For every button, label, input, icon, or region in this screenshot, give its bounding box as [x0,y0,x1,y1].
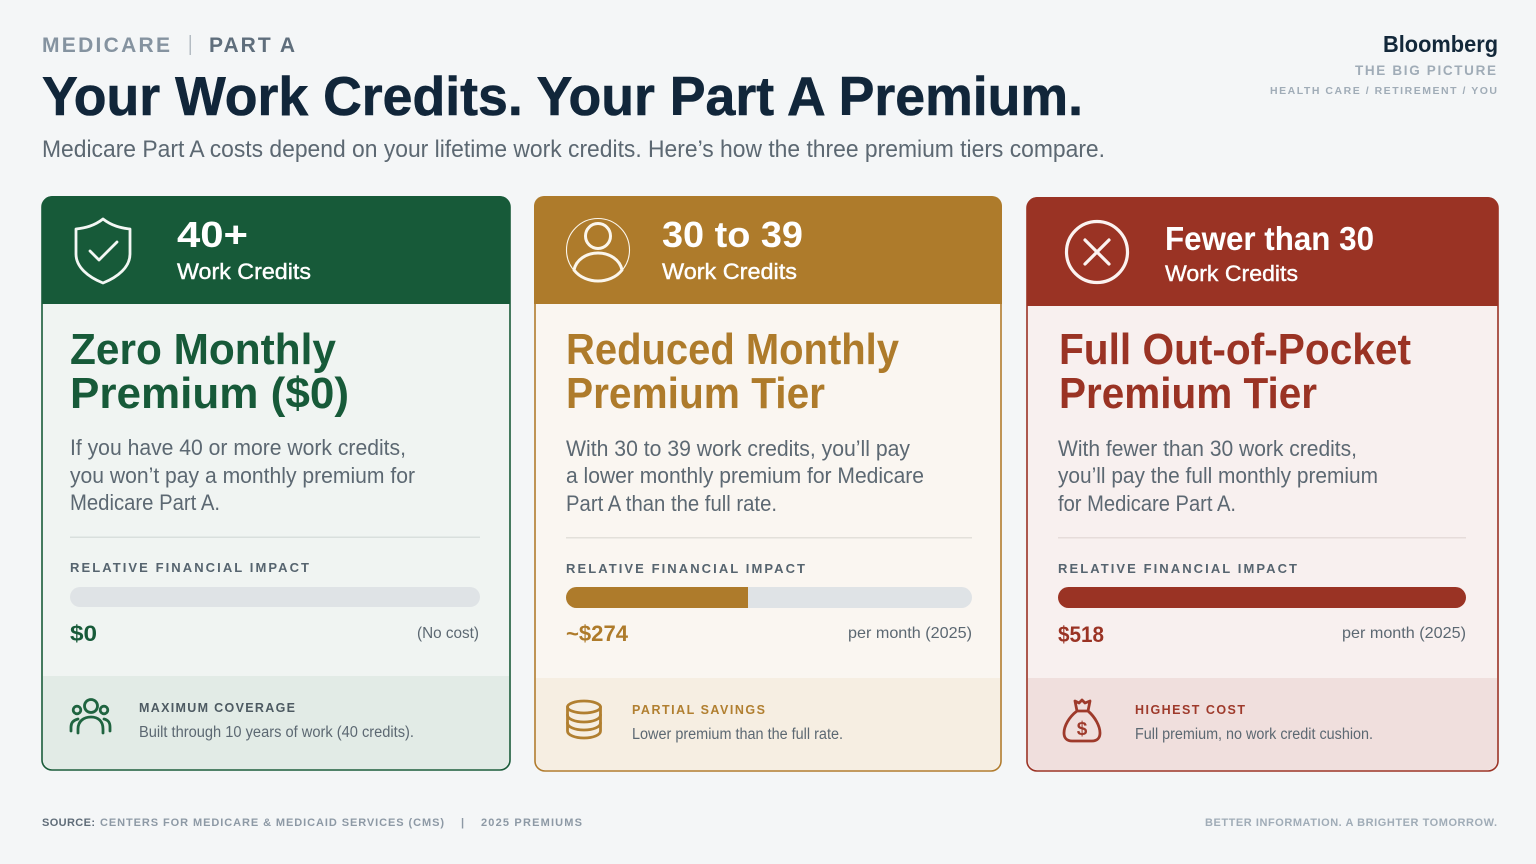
card heading [566,325,899,418]
impact bar [1058,587,1466,608]
impact bar [566,587,972,608]
title: Your Work Credits. Your Part A Premium. [42,65,1083,127]
icon: circle x [1066,222,1128,282]
tier label [1165,220,1374,286]
source line: | [461,817,464,829]
card body: red [1027,198,1498,771]
card body: amber [535,197,1001,771]
icon: coin stack [568,701,600,738]
footer note: PARTIAL SAVINGS [632,703,765,717]
impact value [566,621,972,646]
description: a lower monthly premium for Medicare [566,463,924,488]
description: you’ll pay the full monthly premium [1058,463,1378,488]
source line [42,817,582,829]
source line: CENTERS FOR MEDICARE & MEDICAID SERVICES (CMS) [100,817,444,829]
card heading [70,325,349,418]
card heading: Premium ($0) [70,369,349,418]
tier label: 40+ [177,214,248,255]
tier label: Work Credits [662,259,797,284]
impact value [70,621,479,646]
card header: green [42,196,510,304]
card footer band: amber [536,678,1000,770]
impact value: per month (2025) [1342,625,1466,642]
card heading: Full Out-of-Pocket [1059,325,1411,374]
header kicker: PART A [209,34,295,57]
source line: 2025 PREMIUMS [481,817,582,829]
card heading [1059,325,1411,418]
impact value: $518 [1058,622,1104,647]
card heading: Zero Monthly [70,325,337,374]
description [566,436,924,516]
description [1058,436,1378,516]
brand block: Bloomberg [1383,31,1498,57]
footer note: MAXIMUM COVERAGE [139,701,295,715]
card footer band: red [1028,678,1497,770]
source line: SOURCE: [42,817,95,829]
description [70,435,415,515]
description: for Medicare Part A. [1058,491,1236,516]
icon: money bag [1064,700,1100,741]
panel: fewer than 30 work credits [1027,197,1498,771]
description: With 30 to 39 work credits, you’ll pay [566,436,910,461]
footer note: Full premium, no work credit cushion. [1135,726,1373,743]
impact value: ~$274 [566,621,629,646]
description: If you have 40 or more work credits, [70,435,406,460]
impact value: per month (2025) [848,625,972,642]
subtitle: Medicare Part A costs depend on your lifetime work credits. Here’s how the three premium tiers compare. [42,136,1105,163]
brand block: HEALTH CARE / RETIREMENT / YOU [1270,85,1497,97]
footer note: Lower premium than the full rate. [632,726,843,743]
impact value: (No cost) [417,625,479,642]
footer note [139,701,414,741]
footer note [1135,703,1373,743]
panel: 30 to 39 work credits [534,196,1002,771]
card header: red [1027,197,1498,306]
description: With fewer than 30 work credits, [1058,436,1357,461]
tier label [177,214,311,284]
tier label: 30 to 39 [662,214,803,255]
icon: people [71,700,110,733]
panel: 40+ work credits [42,196,510,770]
footer note: Built through 10 years of work (40 credits). [139,724,414,741]
icon: person in circle [566,218,630,282]
footer note [632,703,843,743]
impact value: $0 [70,621,97,646]
tier label: Fewer than 30 [1165,220,1374,257]
footer note: HIGHEST COST [1135,703,1245,717]
description: you won’t pay a monthly premium for [70,463,415,488]
header kicker: MEDICARE [42,34,170,57]
tagline: BETTER INFORMATION. A BRIGHTER TOMORROW. [1205,817,1497,829]
description: Part A than the full rate. [566,491,777,516]
impact bar [70,587,480,607]
brand block: THE BIG PICTURE [1355,63,1496,78]
card heading: Reduced Monthly [566,325,899,374]
impact value [1058,622,1466,647]
card header: amber [534,196,1002,304]
icon: shield check [76,219,130,283]
impact label: RELATIVE FINANCIAL IMPACT [1058,561,1297,576]
impact label: RELATIVE FINANCIAL IMPACT [70,560,309,575]
tier label: Work Credits [177,259,311,284]
tier label: Work Credits [1165,261,1298,286]
tier label [662,214,803,284]
card heading: Premium Tier [1059,369,1317,418]
header kicker [42,34,295,57]
description: Medicare Part A. [70,490,220,515]
card footer band: green [43,676,509,769]
brand block [1270,31,1498,97]
card heading: Premium Tier [566,369,825,418]
card body: green [42,197,510,770]
impact label: RELATIVE FINANCIAL IMPACT [566,561,805,576]
icon: money bag: $ [1077,719,1088,740]
